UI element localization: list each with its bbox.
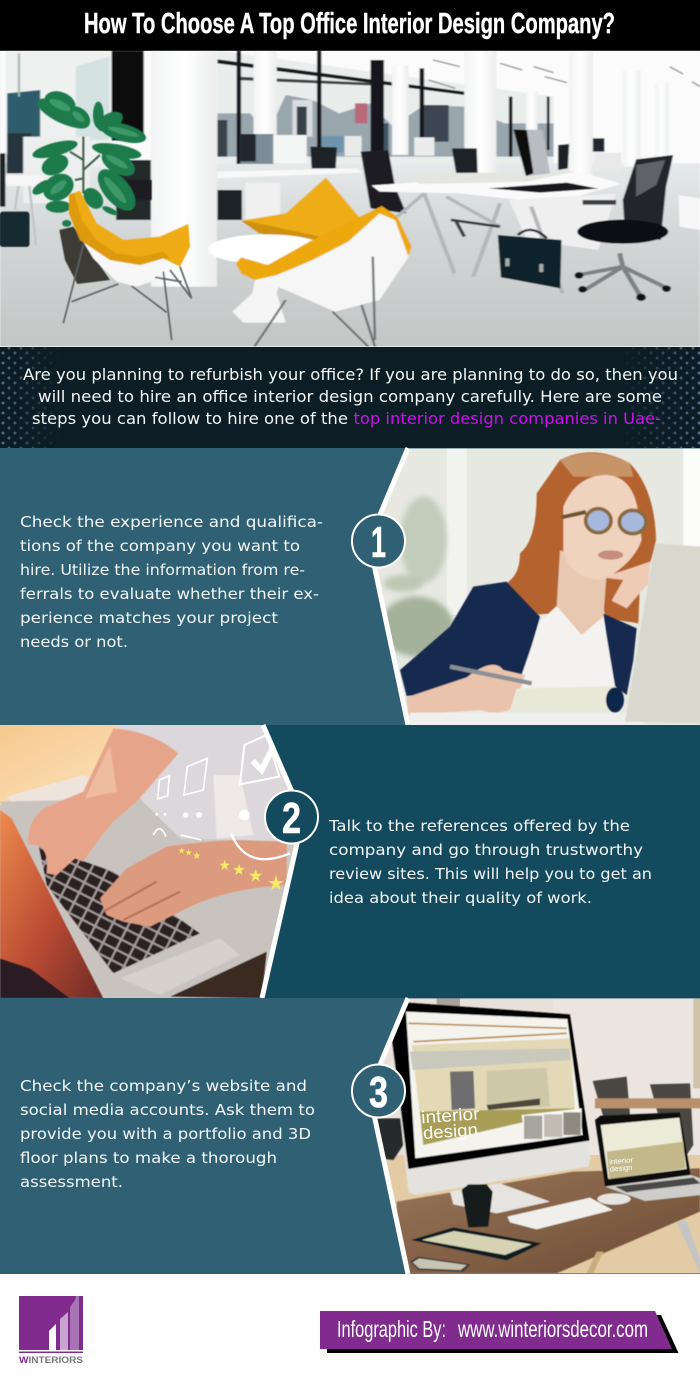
shirt	[517, 606, 615, 689]
arm and hand	[407, 665, 525, 715]
stars: ★	[232, 861, 246, 879]
step text	[20, 1077, 315, 1191]
lips and eyes	[598, 550, 623, 560]
pen	[450, 667, 532, 683]
step text: needs or not.	[20, 633, 128, 651]
hair	[507, 452, 656, 623]
shirt	[113, 725, 293, 842]
panel: step 3	[0, 995, 700, 1278]
stars: ★	[267, 871, 285, 895]
step text: social media accounts. Ask them to	[20, 1101, 315, 1119]
divider stripe	[262, 725, 303, 998]
chair body	[83, 242, 166, 287]
number badge 2	[265, 790, 318, 844]
number badge 1	[352, 514, 405, 568]
plant stems	[70, 137, 100, 193]
phone	[410, 1257, 471, 1272]
front yellow chair	[236, 206, 412, 347]
stars: ★	[192, 851, 201, 862]
step text: provide you with a portfolio and 3D	[20, 1125, 311, 1143]
step text: review sites. This will help you to get an	[329, 865, 652, 883]
step text: assessment.	[20, 1173, 123, 1191]
table	[410, 713, 643, 726]
screen text: interior	[609, 1155, 634, 1166]
laptop screen	[0, 810, 103, 998]
back windows and city	[217, 51, 554, 164]
stars: ★	[178, 846, 186, 856]
lower hand	[100, 840, 287, 927]
number badge 3	[352, 1064, 405, 1118]
step text	[20, 513, 323, 651]
step text: ferrals to evaluate whether their ex-	[20, 585, 319, 603]
laptop deck	[0, 798, 287, 998]
step text: Check the experience and qualifica-	[20, 513, 323, 531]
plant leaves	[30, 87, 148, 227]
step text: perience matches your project	[20, 609, 278, 627]
intro panel: Are you planning to refurbish your office? If you are planning to do so, then you	[23, 365, 678, 384]
black pillar	[112, 51, 144, 141]
cup	[462, 1184, 493, 1228]
intro panel	[0, 347, 700, 448]
left window skyline	[7, 51, 112, 203]
main desks	[371, 129, 621, 293]
iMac	[392, 1002, 591, 1195]
laptop	[595, 1112, 691, 1187]
stars: ★	[185, 849, 193, 859]
laptop	[625, 543, 700, 723]
step text: idea about their quality of work.	[329, 889, 592, 907]
chair seat	[69, 191, 190, 267]
step text: company and go through trustworthy	[329, 841, 643, 859]
columns	[0, 51, 669, 287]
step text: tions of the company you want to	[20, 537, 300, 555]
photo: woman at laptop	[377, 448, 700, 725]
back desks and monitors	[0, 134, 700, 247]
number badge 1: 1	[371, 518, 386, 567]
screen	[406, 1012, 583, 1158]
stars: ★	[218, 858, 231, 874]
photo: hands on laptop with rating icons	[0, 725, 307, 1000]
step text: Talk to the references offered by the	[328, 817, 630, 835]
left chair	[373, 1118, 403, 1160]
step text	[328, 817, 652, 907]
hero photo: open-plan office with yellow chairs	[0, 51, 700, 347]
chair legs	[63, 245, 192, 340]
screen text: interior	[421, 1103, 480, 1127]
panel: step 1	[0, 447, 700, 727]
intro panel: will need to hire an office interior design company carefully. Here are some	[38, 387, 662, 406]
tablet	[411, 1227, 542, 1260]
jacket	[400, 582, 540, 696]
stars	[178, 846, 285, 895]
iMac stand	[450, 1183, 550, 1213]
glasses	[586, 509, 646, 534]
ceiling lights	[429, 60, 700, 88]
side desk and bag	[0, 176, 152, 247]
notebook	[510, 686, 623, 712]
chin hand	[602, 562, 650, 608]
step text: Check the company’s website and	[20, 1077, 307, 1095]
intro panel: top interior design companies in Uae-	[354, 409, 661, 428]
keyboard	[38, 845, 200, 973]
footer logo: Winteriors	[19, 1296, 83, 1366]
back yellow chair	[241, 177, 364, 245]
chairs	[593, 1077, 630, 1117]
step text: hire. Utilize the information from re-	[20, 561, 305, 579]
keyboard	[507, 1198, 613, 1229]
photo: monitor, laptop and tablet on desk	[333, 995, 700, 1278]
office chair	[575, 155, 673, 301]
stars: ★	[248, 867, 263, 887]
rating icons	[153, 735, 290, 859]
hero photo: plant and left yellow chair	[0, 87, 192, 340]
pot	[59, 227, 110, 284]
title banner	[0, 0, 700, 51]
desk	[397, 1168, 700, 1273]
divider stripe	[369, 448, 408, 725]
neck	[557, 550, 607, 635]
intro panel: steps you can follow to hire one of the	[32, 409, 348, 428]
footer logo: Winteriors: WINTERIORS	[19, 1355, 83, 1366]
screen text: design	[609, 1163, 633, 1174]
round table	[208, 234, 326, 323]
upper arm and hand	[28, 728, 178, 875]
face	[563, 475, 642, 580]
footer credit banner	[320, 1311, 678, 1353]
mouse	[597, 1193, 631, 1205]
divider stripe	[369, 998, 408, 1274]
panel: step 2	[0, 725, 700, 1000]
screen text: design	[422, 1119, 478, 1143]
number badge 2: 2	[282, 794, 301, 843]
screen text	[421, 1103, 634, 1174]
briefcase	[498, 230, 562, 288]
number badge 3: 3	[369, 1068, 388, 1117]
footer credit banner: Infographic By:	[337, 1316, 446, 1342]
step text: floor plans to make a thorough	[20, 1149, 277, 1167]
